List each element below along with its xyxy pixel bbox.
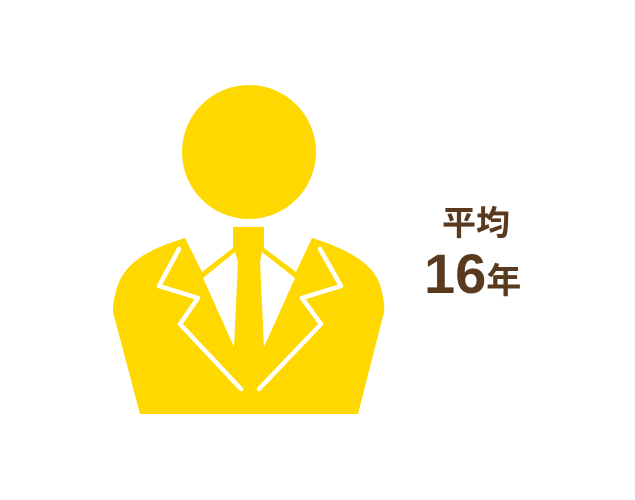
body: [113, 227, 384, 414]
text: average 16 years: 16年: [424, 242, 521, 305]
icon: businessman: [113, 85, 384, 414]
text: average 16 years: 平均: [442, 205, 510, 243]
lapel lines: [159, 249, 241, 389]
head: [182, 85, 316, 219]
shirt collar white: [203, 252, 238, 347]
text: average 16 years: [424, 205, 521, 305]
